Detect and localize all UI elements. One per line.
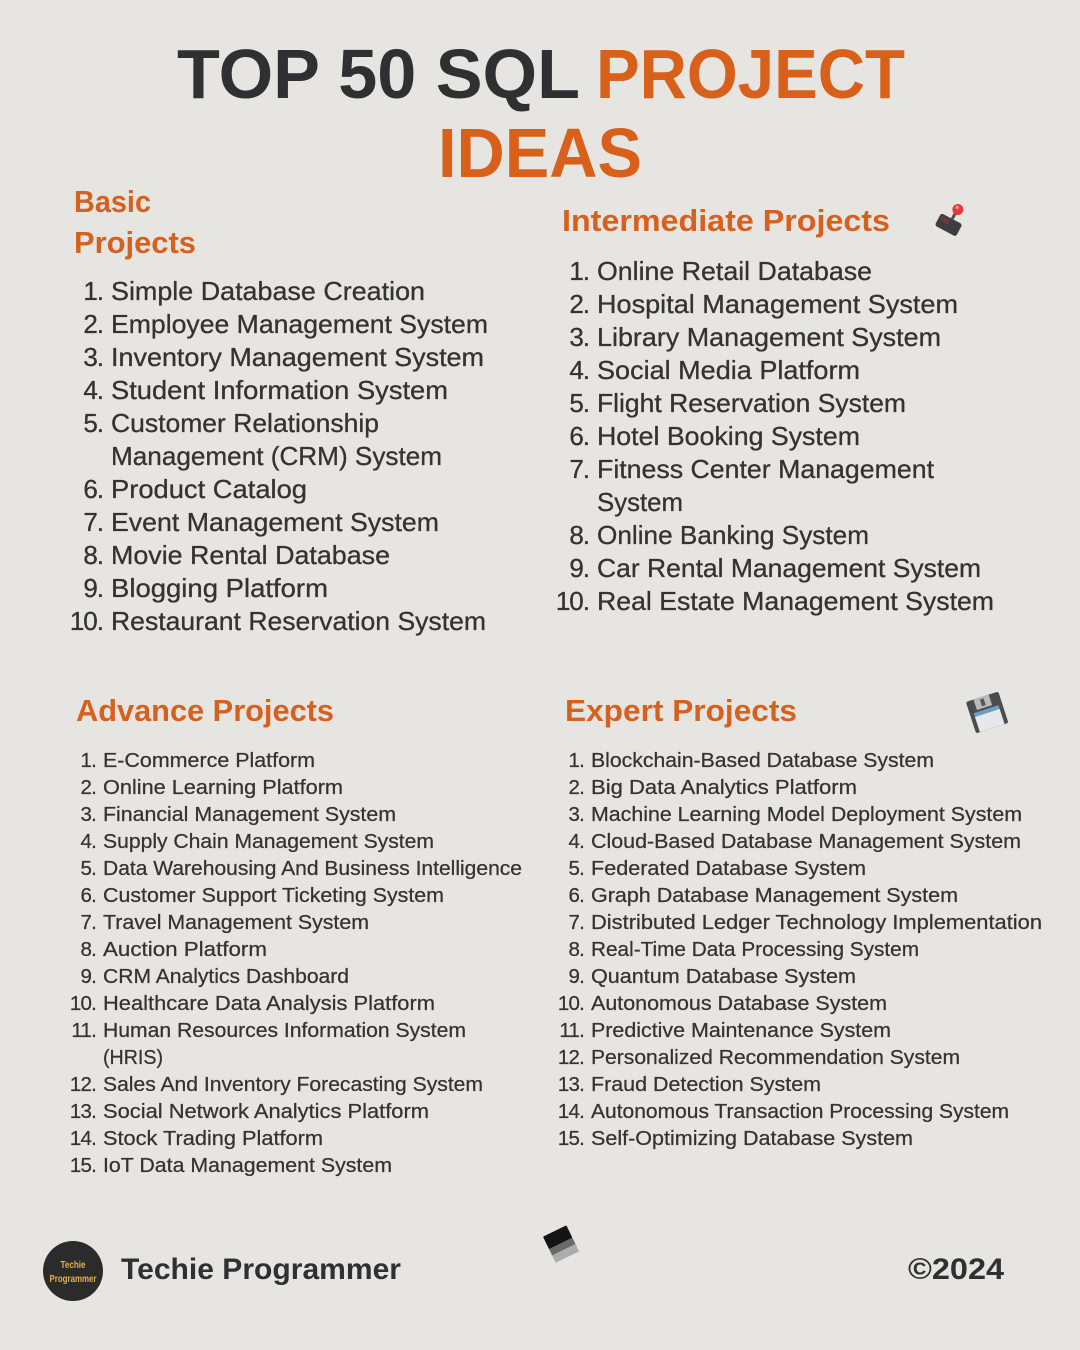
- icon: joystick: [935, 199, 970, 237]
- list: advance projects: 5.: [80, 857, 96, 880]
- list: expert projects: 6.: [568, 884, 584, 907]
- list: advance projects: Sales And Inventory Forecasting System: [103, 1073, 483, 1096]
- list: expert projects: Real-Time Data Processing System: [591, 938, 919, 961]
- list: expert projects: Autonomous Transaction Processing System: [591, 1100, 1009, 1123]
- panel: advance projects: [70, 693, 522, 1177]
- list: expert projects: 1.: [568, 749, 584, 772]
- list: advance projects: Financial Management System: [103, 803, 396, 826]
- list: basic projects: Movie Rental Database: [111, 540, 390, 570]
- list: expert projects: 8.: [568, 938, 584, 961]
- icon: floppy disk: [966, 692, 1008, 733]
- list: advance projects: 7.: [80, 911, 96, 934]
- list: advance projects: 8.: [80, 938, 96, 961]
- list: intermediate projects: 2.: [569, 289, 589, 319]
- list: expert projects: 4.: [568, 830, 584, 853]
- list: intermediate projects: Real Estate Management System: [597, 586, 994, 616]
- list: intermediate projects: 1.: [569, 256, 589, 286]
- footer year: ©2024: [908, 1253, 1004, 1286]
- list: basic projects: 7.: [83, 507, 103, 537]
- list: advance projects: 3.: [80, 803, 96, 826]
- list: expert projects: [558, 749, 1042, 1150]
- list: advance projects: 9.: [80, 965, 96, 988]
- list: expert projects: 14.: [558, 1100, 584, 1123]
- title: PROJECT: [596, 35, 905, 113]
- title: TOP 50 SQL: [177, 35, 580, 113]
- list: intermediate projects: Online Banking System: [597, 520, 869, 550]
- list: basic projects: Student Information System: [111, 375, 448, 405]
- list: advance projects: Auction Platform: [103, 938, 267, 961]
- list: advance projects: [70, 749, 522, 1177]
- list: basic projects: Management (CRM) System: [111, 441, 442, 471]
- list: advance projects: 6.: [80, 884, 96, 907]
- list: basic projects: Customer Relationship: [111, 408, 379, 438]
- list: advance projects: IoT Data Management System: [103, 1154, 392, 1177]
- list: intermediate projects: 9.: [569, 553, 589, 583]
- list: advance projects: 14.: [70, 1127, 96, 1150]
- list: basic projects: 8.: [83, 540, 103, 570]
- list: advance projects: Online Learning Platform: [103, 776, 343, 799]
- list: basic projects: Inventory Management System: [111, 342, 484, 372]
- title: IDEAS: [438, 114, 642, 192]
- footer logo: Programmer: [50, 1274, 97, 1285]
- footer logo: Techie: [60, 1260, 86, 1271]
- title: [177, 35, 905, 192]
- list: basic projects: [70, 276, 488, 636]
- list: intermediate projects: 3.: [569, 322, 589, 352]
- list: basic projects: Simple Database Creation: [111, 276, 425, 306]
- list: intermediate projects: System: [597, 487, 683, 517]
- heading: expert projects: Expert Projects: [565, 693, 797, 728]
- list: basic projects: Restaurant Reservation System: [111, 606, 486, 636]
- list: expert projects: 12.: [558, 1046, 584, 1069]
- icon: laptop: [543, 1225, 579, 1263]
- list: advance projects: 15.: [70, 1154, 96, 1177]
- list: expert projects: Blockchain-Based Database System: [591, 749, 934, 772]
- list: intermediate projects: 8.: [569, 520, 589, 550]
- list: intermediate projects: 7.: [569, 454, 589, 484]
- list: expert projects: 13.: [558, 1073, 584, 1096]
- list: basic projects: 6.: [83, 474, 103, 504]
- list: intermediate projects: Hospital Management System: [597, 289, 958, 319]
- list: basic projects: Product Catalog: [111, 474, 307, 504]
- list: expert projects: Machine Learning Model Deployment System: [591, 803, 1022, 826]
- panel: intermediate projects: [556, 199, 994, 616]
- list: advance projects: Data Warehousing And Business Intelligence: [103, 857, 522, 880]
- list: basic projects: 2.: [83, 309, 103, 339]
- list: expert projects: 11.: [559, 1019, 584, 1042]
- list: advance projects: CRM Analytics Dashboard: [103, 965, 349, 988]
- list: expert projects: Personalized Recommendation System: [591, 1046, 960, 1069]
- list: basic projects: Blogging Platform: [111, 573, 328, 603]
- list: expert projects: Fraud Detection System: [591, 1073, 821, 1096]
- list: intermediate projects: Fitness Center Management: [597, 454, 935, 484]
- list: intermediate projects: [556, 256, 994, 616]
- list: advance projects: Human Resources Information System: [103, 1019, 466, 1042]
- list: basic projects: 10.: [70, 606, 103, 636]
- list: expert projects: 5.: [568, 857, 584, 880]
- list: advance projects: Travel Management System: [103, 911, 369, 934]
- heading: advance projects: Advance Projects: [76, 693, 334, 728]
- list: advance projects: Stock Trading Platform: [103, 1127, 323, 1150]
- list: advance projects: E-Commerce Platform: [103, 749, 315, 772]
- list: basic projects: 4.: [83, 375, 103, 405]
- list: expert projects: Predictive Maintenance System: [591, 1019, 891, 1042]
- list: intermediate projects: Car Rental Management System: [597, 553, 981, 583]
- list: intermediate projects: Flight Reservation System: [597, 388, 906, 418]
- list: advance projects: 2.: [80, 776, 96, 799]
- list: advance projects: (HRIS): [103, 1046, 163, 1069]
- list: expert projects: Big Data Analytics Platform: [591, 776, 857, 799]
- list: advance projects: 10.: [70, 992, 96, 1015]
- panel: expert projects: [558, 692, 1042, 1150]
- list: basic projects: 1.: [83, 276, 103, 306]
- list: expert projects: 15.: [558, 1127, 584, 1150]
- panel: basic projects: [70, 184, 488, 636]
- heading: basic projects: [74, 184, 196, 260]
- list: expert projects: Distributed Ledger Technology Implementation: [591, 911, 1042, 934]
- list: expert projects: 10.: [558, 992, 584, 1015]
- list: intermediate projects: 4.: [569, 355, 589, 385]
- list: advance projects: 12.: [70, 1073, 96, 1096]
- list: advance projects: Healthcare Data Analysis Platform: [103, 992, 435, 1015]
- footer brand name: Techie Programmer: [121, 1253, 401, 1286]
- list: basic projects: Event Management System: [111, 507, 439, 537]
- list: expert projects: Graph Database Management System: [591, 884, 958, 907]
- list: intermediate projects: Hotel Booking System: [597, 421, 860, 451]
- list: expert projects: Autonomous Database System: [591, 992, 887, 1015]
- list: basic projects: Employee Management System: [111, 309, 488, 339]
- footer logo: [43, 1241, 103, 1301]
- list: expert projects: 2.: [568, 776, 584, 799]
- list: advance projects: 1.: [80, 749, 96, 772]
- list: intermediate projects: 10.: [556, 586, 589, 616]
- list: advance projects: 4.: [80, 830, 96, 853]
- list: expert projects: Self-Optimizing Database System: [591, 1127, 913, 1150]
- list: advance projects: Social Network Analytics Platform: [103, 1100, 429, 1123]
- list: intermediate projects: Library Management System: [597, 322, 941, 352]
- list: intermediate projects: 6.: [569, 421, 589, 451]
- list: expert projects: Quantum Database System: [591, 965, 856, 988]
- list: intermediate projects: Online Retail Database: [597, 256, 872, 286]
- list: expert projects: Federated Database System: [591, 857, 866, 880]
- heading: intermediate projects: Intermediate Projects: [562, 203, 890, 238]
- list: expert projects: Cloud-Based Database Management System: [591, 830, 1021, 853]
- list: expert projects: 3.: [568, 803, 584, 826]
- list: expert projects: 9.: [568, 965, 584, 988]
- list: advance projects: 13.: [70, 1100, 96, 1123]
- list: intermediate projects: Social Media Platform: [597, 355, 860, 385]
- list: advance projects: Supply Chain Management System: [103, 830, 434, 853]
- list: advance projects: Customer Support Ticketing System: [103, 884, 444, 907]
- list: intermediate projects: 5.: [569, 388, 589, 418]
- list: basic projects: 9.: [83, 573, 103, 603]
- list: advance projects: 11.: [71, 1019, 96, 1042]
- heading: basic projects: Basic: [74, 184, 151, 219]
- list: basic projects: 3.: [83, 342, 103, 372]
- list: basic projects: 5.: [83, 408, 103, 438]
- heading: basic projects: Projects: [74, 225, 196, 260]
- list: expert projects: 7.: [568, 911, 584, 934]
